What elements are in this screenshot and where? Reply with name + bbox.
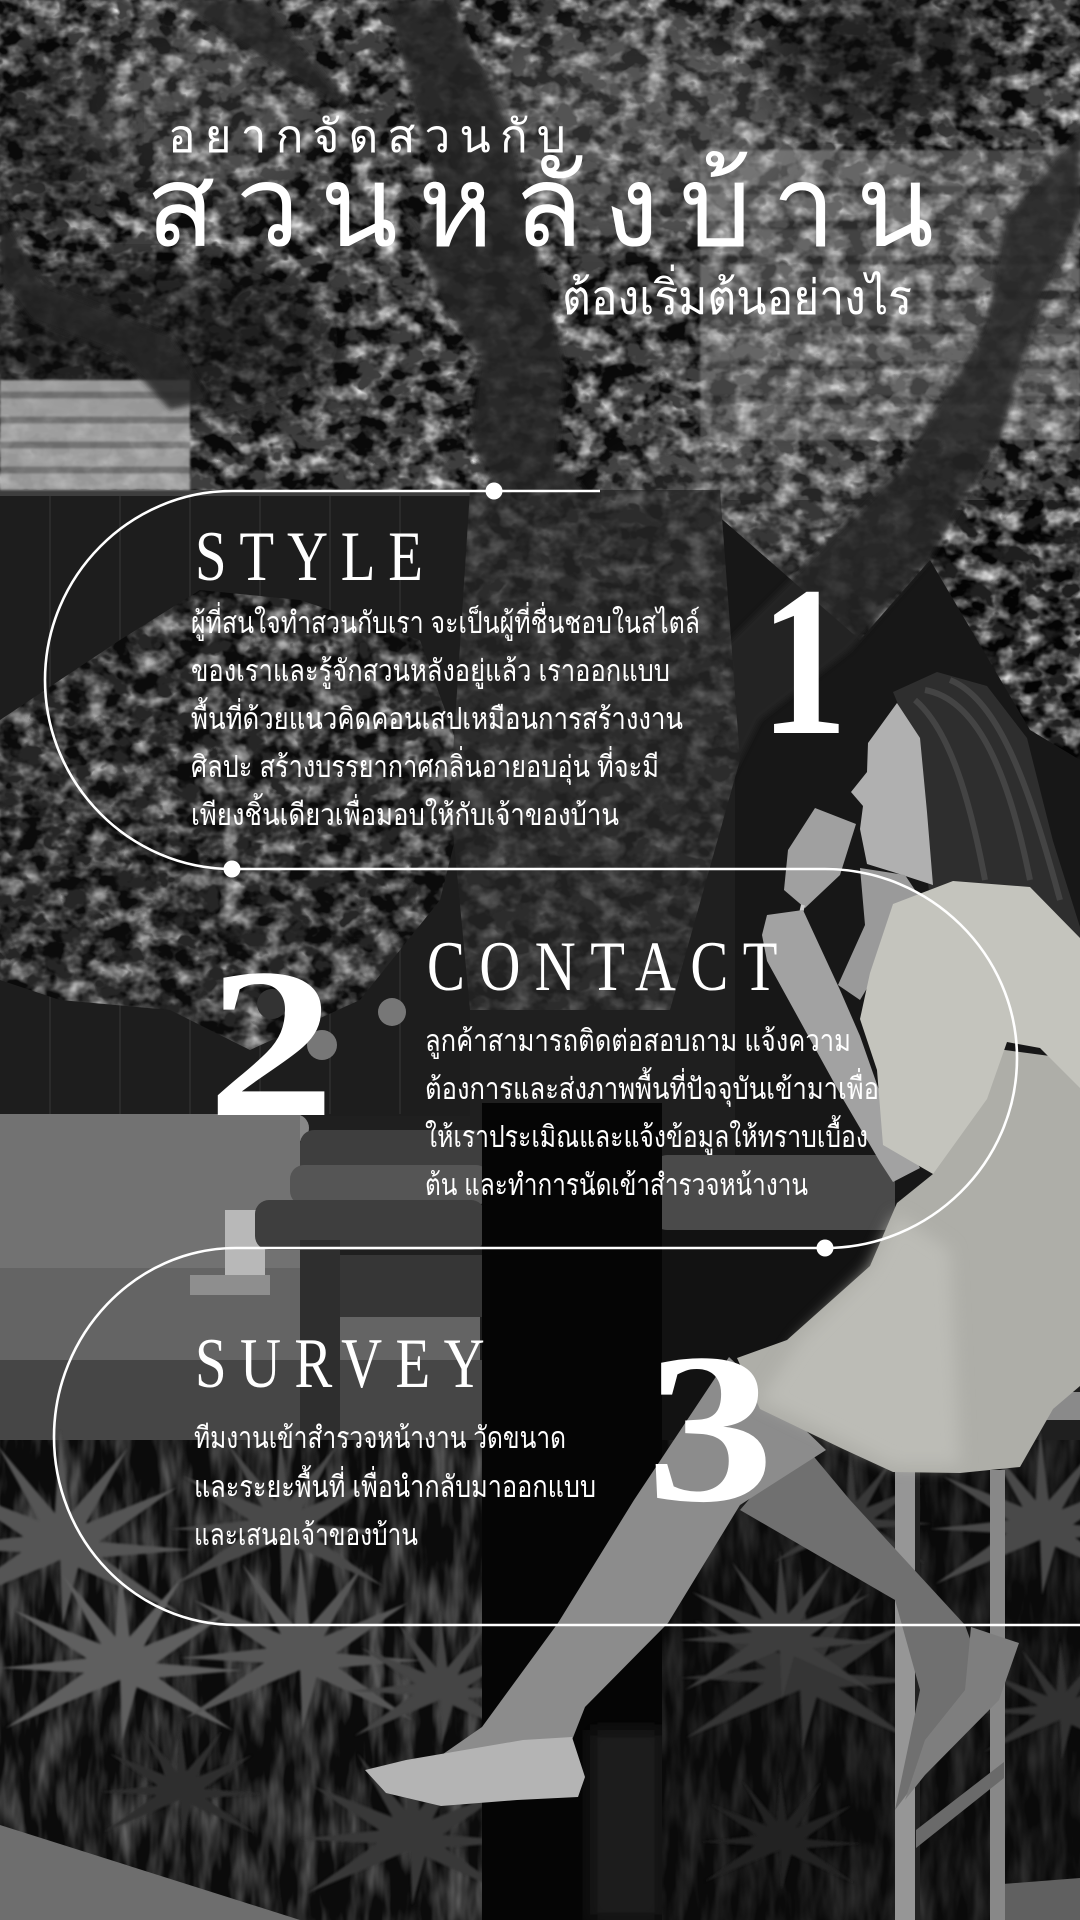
lower tree foliage <box>0 590 454 1050</box>
wine glass <box>784 808 856 930</box>
number 3: 3 <box>646 1310 774 1547</box>
text: survey body: ทีมงานเข้าสำรวจหน้างาน วัดขนาด <box>194 1422 566 1455</box>
dot: section 2 bottom <box>816 1240 834 1256</box>
christmas baubles <box>257 989 406 1142</box>
canopy underlay <box>0 0 1080 500</box>
logs <box>255 1130 895 1450</box>
connector lines and dots <box>45 482 1080 1625</box>
text: style body: ของเราและรู้จักสวนหลังอยู่แล้ว เราออกแบบ <box>191 655 670 689</box>
palm garden right <box>662 1430 1080 1920</box>
dot: section 1 top <box>486 482 502 500</box>
heading: contact: CONTACT <box>427 927 777 1005</box>
tree trunks and branches <box>0 0 1080 800</box>
tree canopy <box>0 0 1080 780</box>
front shoe <box>365 1737 585 1806</box>
line: section 1 <box>45 491 600 869</box>
text: style body: ศิลปะ สร้างบรรยากาศกลิ่นอายอบอุ่น ที่จะมี <box>191 746 659 786</box>
text: contact body: ต้น และทำการนัดเข้าสำรวจหน้างาน <box>425 1169 808 1202</box>
title line 2: สวนหลังบ้าน <box>146 144 934 271</box>
stool legs <box>895 1392 1080 1920</box>
building slats right <box>700 150 1080 440</box>
text: contact body: ลูกค้าสามารถติดต่อสอบถาม แจ้งความ <box>425 1025 851 1059</box>
panel: style <box>191 517 848 832</box>
text: survey body: และเสนอเจ้าของบ้าน <box>194 1519 418 1552</box>
text: survey body <box>194 1422 596 1552</box>
text: survey body: และระยะพื้นที่ เพื่อนำกลับมาออกแบบ <box>194 1465 596 1504</box>
dot: section 1 bottom <box>224 860 240 878</box>
arm behind face <box>838 868 925 1000</box>
dark wall right <box>700 500 1080 1260</box>
right lower wall <box>660 1230 910 1450</box>
text: style body: พื้นที่ด้วยแนวคิดคอนเสปเหมือนการสร้างงาน <box>191 697 683 736</box>
palm garden left <box>0 1430 532 1920</box>
heading: survey: SURVEY <box>195 1324 485 1402</box>
number 1: 1 <box>760 544 848 780</box>
pale wall and bench <box>0 1114 485 1475</box>
black column <box>482 1103 662 1920</box>
title line 1: อยากจัดสวนกับ <box>168 110 566 162</box>
line: section 3 <box>54 1248 1080 1625</box>
heading: style: STYLE <box>195 517 423 595</box>
skirt <box>737 1040 1080 1473</box>
panel: contact <box>207 925 879 1202</box>
panel: survey <box>194 1310 774 1552</box>
building slats left <box>0 380 190 490</box>
number 2: 2 <box>207 925 335 1162</box>
front leg <box>420 1357 826 1770</box>
text: style body: เพียงชิ้นเดียวเพื่อมอบให้กับเจ้าของบ้าน <box>191 793 619 832</box>
text: style body: ผู้ที่สนใจทำสวนกับเรา จะเป็นผู้ที่ชื่นชอบในสไตล์ <box>191 602 700 641</box>
title line 3: ต้องเริ่มต้นอย่างไร <box>562 264 912 325</box>
back leg and shoe <box>740 1440 1019 1810</box>
text: contact body: ต้องการและส่งภาพพื้นที่ปัจจุบันเข้ามาเพื่อ <box>425 1067 879 1108</box>
text: style body <box>191 602 700 832</box>
hair <box>893 672 1080 1000</box>
dark wall left <box>0 496 470 1116</box>
text: contact body <box>425 1025 879 1202</box>
lower trunk <box>450 490 739 1010</box>
pavement <box>0 1825 1080 1920</box>
cape sleeve <box>860 881 1080 1174</box>
face <box>851 703 933 885</box>
text: contact body: ให้เราประเมิณและแจ้งข้อมูลให้ทราบเบื้อง <box>425 1115 868 1155</box>
title block <box>146 110 934 325</box>
line: section 2 <box>232 869 1017 1248</box>
forearm and hand <box>762 910 920 1182</box>
